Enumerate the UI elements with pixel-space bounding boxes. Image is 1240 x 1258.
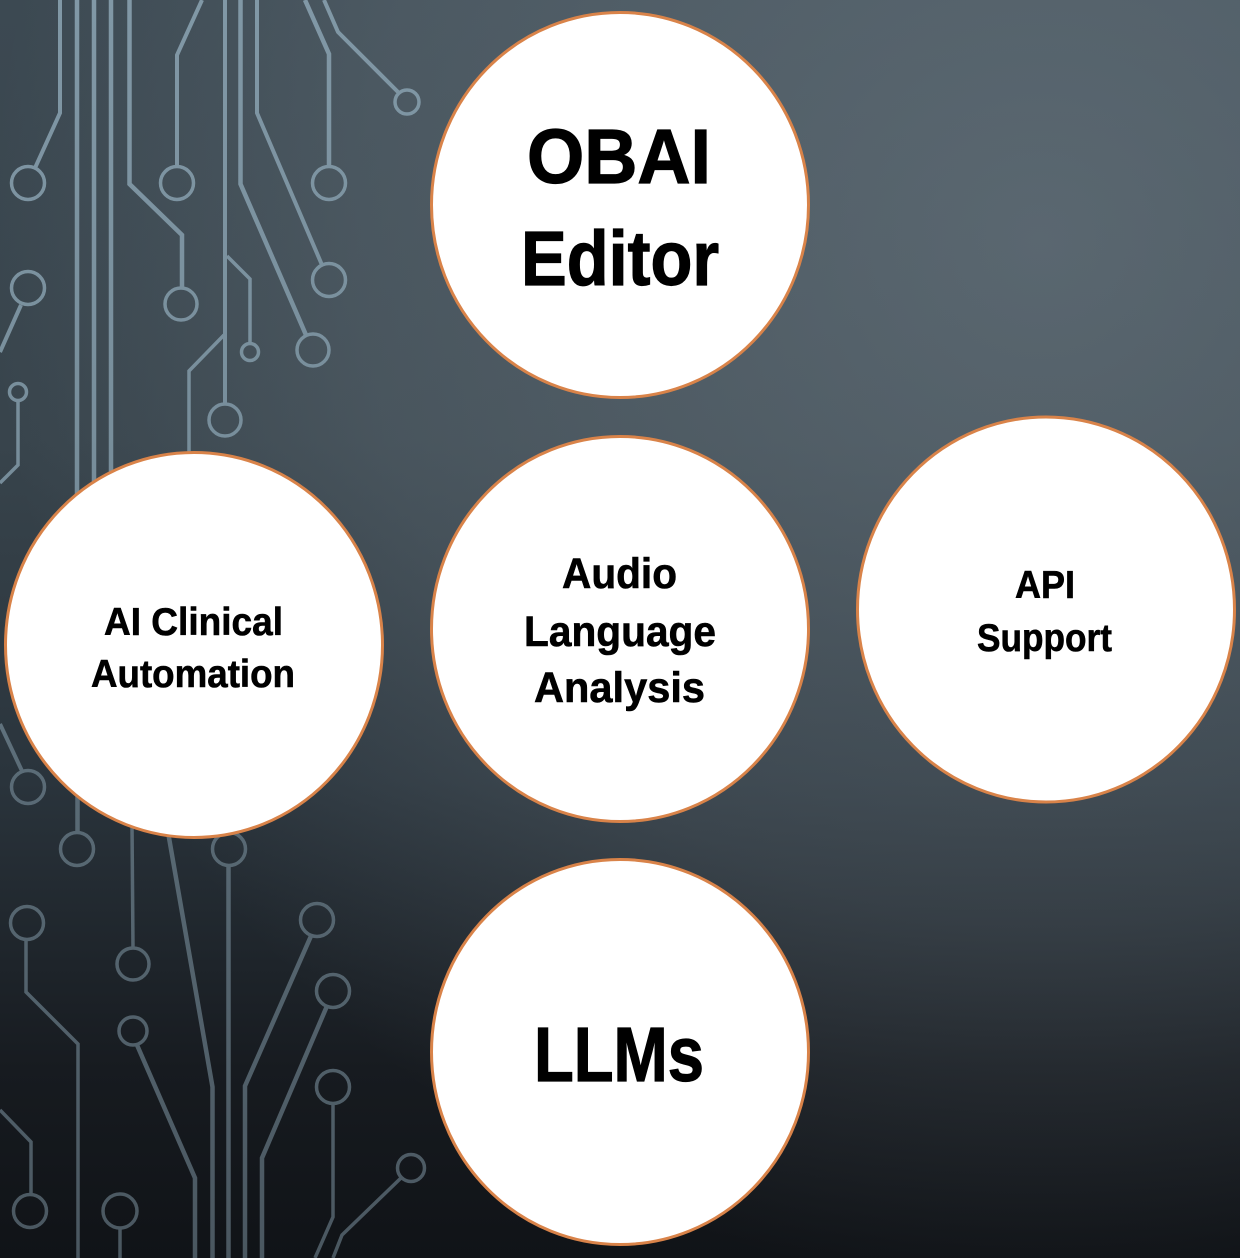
label: Editor: Editor <box>521 216 719 302</box>
label: Language: Language <box>524 608 716 656</box>
label: Support: Support <box>977 617 1112 660</box>
circle: Audio Language Analysis <box>432 436 808 822</box>
circle: AI Clinical Automation <box>6 452 382 838</box>
label: Audio: Audio <box>562 550 677 598</box>
label: Analysis: Analysis <box>534 664 705 712</box>
circle: LLMs <box>432 860 808 1244</box>
circuit board pattern: bottom <box>0 724 424 1258</box>
circle: API Support <box>858 417 1234 802</box>
label: API: API <box>1015 564 1075 607</box>
label: OBAI: OBAI <box>527 114 711 200</box>
label: AI Clinical: AI Clinical <box>104 601 283 644</box>
label: Automation: Automation <box>91 653 295 696</box>
circle: OBAI Editor <box>432 12 808 398</box>
circuit board pattern: top <box>0 0 419 500</box>
label: LLMs: LLMs <box>534 1012 704 1098</box>
